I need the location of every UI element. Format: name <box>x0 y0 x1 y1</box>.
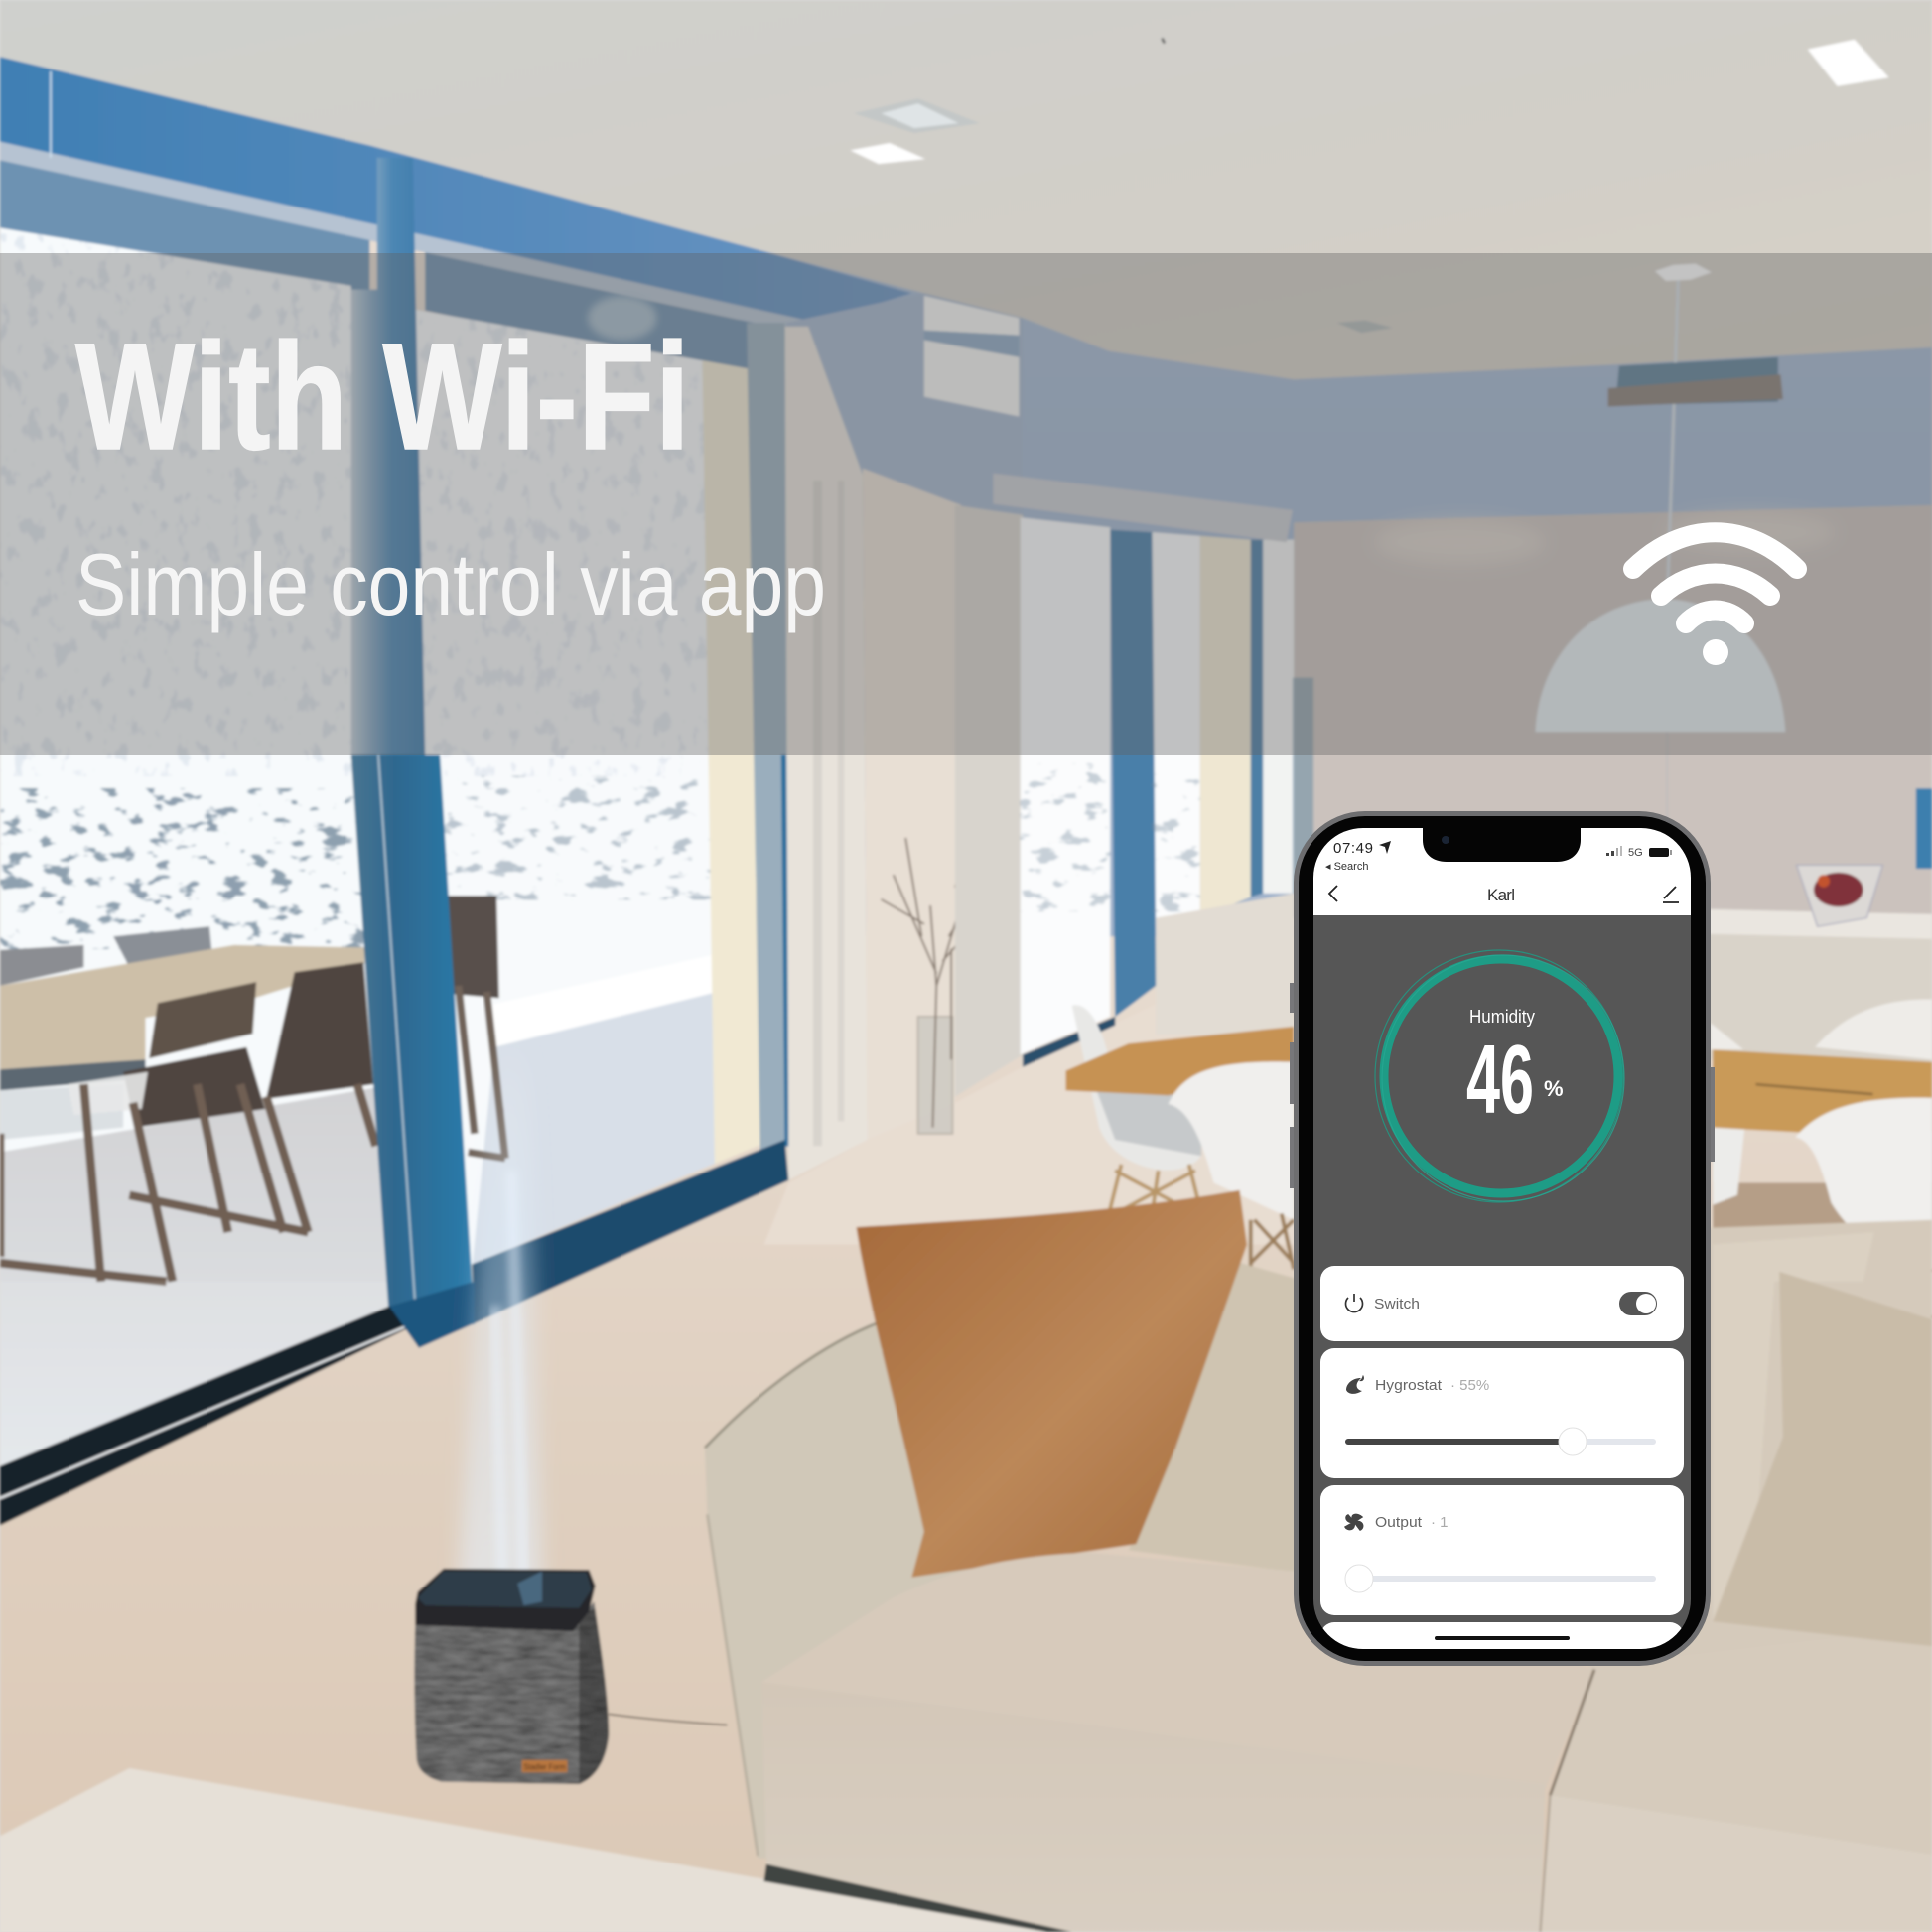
toggle <box>1619 1292 1657 1315</box>
humidity ring <box>1375 950 1624 1202</box>
notch <box>1423 828 1581 862</box>
back wall window <box>955 474 1313 1097</box>
rug <box>0 1768 1072 1932</box>
back chevron <box>1329 886 1337 901</box>
lid <box>415 1569 595 1631</box>
icon: wifi <box>1633 532 1797 665</box>
switch card <box>1320 1266 1684 1341</box>
sofa <box>705 1190 1932 1932</box>
ceiling fixtures <box>850 38 1889 333</box>
seat cushion left <box>761 1553 1594 1789</box>
sofa arm <box>705 1322 986 1859</box>
vase with branches <box>881 813 1004 1134</box>
output card <box>1320 1485 1684 1615</box>
left window glass <box>0 221 394 1478</box>
humidifier device <box>407 1569 727 1793</box>
hygrostat value: · 55% <box>1450 1377 1489 1394</box>
title: With Wi-Fi <box>75 312 690 482</box>
bottom card <box>1322 1622 1682 1649</box>
hygrostat card <box>1320 1348 1684 1478</box>
far floor under table <box>1713 1182 1932 1257</box>
subtitle: Simple control via app <box>75 535 826 633</box>
wood tables <box>1066 1027 1932 1134</box>
app header <box>1313 828 1691 915</box>
kitchen island <box>1156 894 1932 1072</box>
back right pillow <box>1713 1232 1874 1621</box>
output label: Output <box>1375 1514 1423 1531</box>
outdoor chair <box>440 896 505 1159</box>
humidity value: 46 <box>1466 1025 1534 1134</box>
screen title: Karl <box>1487 886 1515 904</box>
power icon <box>1346 1294 1362 1312</box>
droplet icon <box>1346 1375 1364 1394</box>
pendant lamp <box>1535 264 1785 863</box>
back to search: ◂ Search <box>1325 861 1368 873</box>
ceiling <box>0 0 1932 379</box>
wall vent windows <box>924 296 1019 416</box>
app dark panel <box>1313 915 1691 1649</box>
dining chairs front <box>1169 1062 1932 1318</box>
output value: · 1 <box>1431 1514 1449 1531</box>
brown leather pillow <box>857 1190 1247 1578</box>
fabric body <box>407 1601 617 1793</box>
status icons <box>1606 846 1672 859</box>
fruit bowl <box>1797 865 1882 926</box>
switch label: Switch <box>1374 1296 1420 1312</box>
phone side buttons <box>1290 983 1715 1188</box>
inner side wall <box>863 469 961 1140</box>
blue window header beam <box>0 57 911 384</box>
right pillow <box>1713 1272 1932 1646</box>
phone screen <box>1313 828 1691 1662</box>
fan icon <box>1345 1514 1363 1530</box>
humidity label: Humidity <box>1469 1007 1535 1027</box>
status icons: 5G <box>1628 847 1643 859</box>
phone mockup <box>1290 811 1715 1666</box>
brand label <box>522 1760 568 1772</box>
blue window column <box>351 158 475 1324</box>
mist column <box>459 1035 542 1589</box>
door handle <box>758 806 768 871</box>
status bar time: 07:49 <box>1333 840 1374 857</box>
seat right <box>1539 1626 1932 1932</box>
power cable <box>609 1714 727 1725</box>
hygrostat label: Hygrostat <box>1375 1377 1443 1394</box>
grey translucent banner <box>0 253 1932 755</box>
home indicator <box>1435 1636 1570 1640</box>
back wall <box>740 234 1932 936</box>
centre window glass <box>407 296 763 1282</box>
hygrostat slider <box>1345 1428 1656 1455</box>
right window frame <box>747 323 788 1159</box>
percent sign: % <box>1544 1076 1564 1101</box>
wall air unit <box>1608 357 1783 407</box>
beige pillow <box>1129 1245 1307 1574</box>
curtains <box>785 327 868 1180</box>
far floor <box>763 1004 1294 1245</box>
window sill <box>0 1140 788 1525</box>
base shadow <box>763 1864 1072 1932</box>
output slider <box>1345 1565 1656 1592</box>
dining chairs rear <box>1072 999 1932 1213</box>
brand label: Stadler Form <box>523 1762 566 1772</box>
status bar time <box>1333 840 1391 857</box>
outdoor dining furniture <box>0 926 376 1282</box>
phone body <box>1294 811 1711 1666</box>
seat front left <box>761 1682 1545 1932</box>
edit icon <box>1663 887 1679 902</box>
side wall beside window <box>786 293 1023 863</box>
camera <box>1442 836 1449 844</box>
